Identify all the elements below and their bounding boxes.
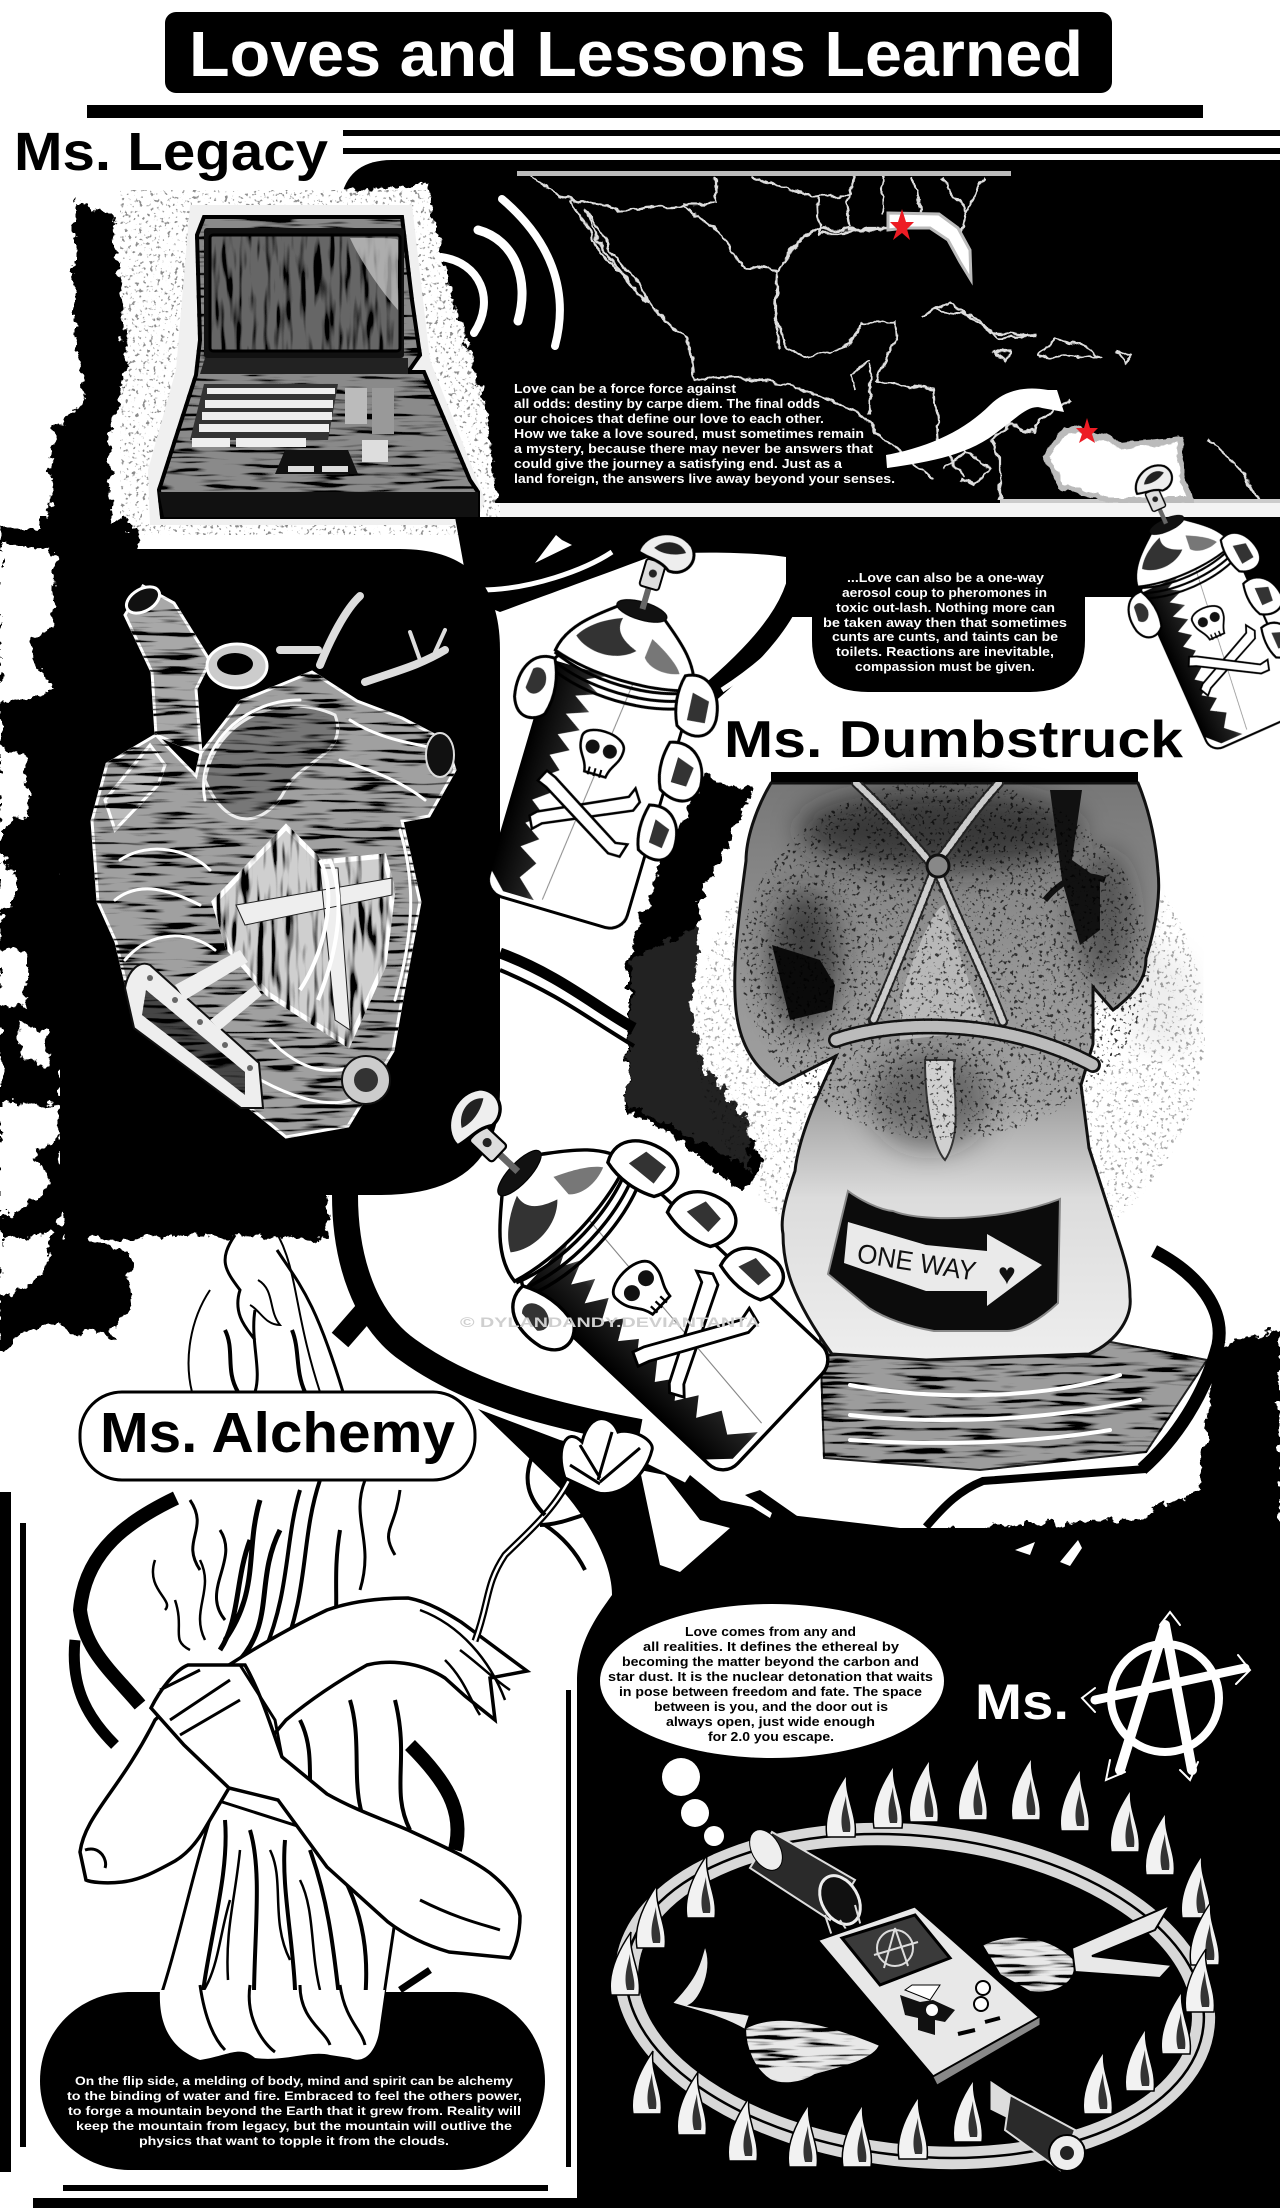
illustration: bear trap — [597, 1757, 1233, 2199]
text block: Ms. Dumbstruck: toxic out-lash. Nothing more can — [836, 600, 1055, 615]
map bottom border — [1000, 499, 1280, 503]
side bars: Ms. Alchemy frame — [0, 1492, 577, 2208]
heading pill: Ms. Alchemy — [80, 1392, 475, 1480]
illustration: bound torso — [695, 780, 1207, 1470]
torso body — [735, 783, 1159, 1360]
heading pill: Ms. Alchemy: Ms. Alchemy — [100, 1401, 455, 1465]
highlight strokes — [115, 700, 445, 1103]
black brush stripes — [680, 1475, 810, 1528]
text block: Ms. Dumbstruck: toilets. Reactions are inevitable, — [836, 644, 1054, 659]
tattoo: one way sign — [828, 1191, 1060, 1331]
text block: Ms. Alchemy: to forge a mountain beyond the Earth that it grew from. Reality will — [68, 2106, 521, 2118]
text block: Ms. Anarchy: always open, just wide enough — [666, 1715, 875, 1729]
text block: Ms. Anarchy: star dust. It is the nuclear detonation that waits — [608, 1670, 933, 1684]
gear — [342, 1056, 390, 1104]
spring cylinder: bottom — [990, 2080, 1085, 2171]
panel: Ms. Legacy — [48, 160, 1280, 535]
specks over torso — [740, 780, 1150, 1140]
panel: heart backdrop — [60, 549, 500, 1240]
red star: south — [1076, 418, 1098, 443]
flames above heading — [189, 1215, 343, 1392]
fabric folds — [850, 1375, 1140, 1443]
heading: Ms. Legacy: Ms. Legacy — [14, 122, 328, 182]
text block: Ms. Dumbstruck: compassion must be given. — [855, 659, 1035, 674]
icon: laptop — [159, 217, 478, 517]
hair strands over pill — [200, 1985, 365, 2052]
text block: Ms. Dumbstruck: be taken away then that sometimes — [823, 615, 1067, 630]
laptop white splash — [118, 186, 500, 530]
text block: Ms. Anarchy: for 2.0 you escape. — [708, 1730, 834, 1744]
arm: hand left to elbow right — [151, 1665, 520, 1958]
text block: Ms. Legacy: our choices that define our love to each other. — [514, 411, 824, 426]
text block: Ms. Dumbstruck: ...Love can also be a one-way — [847, 570, 1045, 585]
arm: elbow left to hand right — [80, 1598, 527, 1883]
shield — [214, 827, 393, 1045]
panel: Ms. Anarchy black ground — [478, 1330, 1280, 2208]
text block: Ms. Anarchy — [608, 1625, 933, 1744]
text block: Ms. Legacy: Love can be a force force against — [514, 381, 737, 396]
ropes — [836, 783, 1093, 1065]
text block: Ms. Legacy — [514, 381, 895, 486]
text block: Ms. Anarchy: Love comes from any and — [685, 1625, 856, 1639]
inner pale halo — [148, 205, 485, 525]
trap levers — [645, 1905, 1172, 2083]
outer spray specks — [695, 780, 1205, 1280]
arrow to Venezuela — [886, 389, 1064, 468]
pale spray halo — [1124, 947, 1196, 1052]
spray can: far right — [1077, 440, 1280, 761]
Venezuela highlighted — [1046, 428, 1190, 500]
illustration: Ms. Alchemy figure — [74, 1215, 652, 2056]
illustration: armoured heart — [92, 581, 455, 1137]
icon: anarchy symbol — [1082, 1612, 1250, 1780]
tattoo: one way sign: ONE WAY — [855, 1238, 978, 1287]
text block: Ms. Anarchy: between is you, and the door out is — [654, 1700, 888, 1714]
swoosh — [695, 560, 800, 705]
sweeping curves below heart — [340, 1195, 640, 1432]
text block: Ms. Legacy: land foreign, the answers live away beyond your senses. — [514, 471, 895, 486]
map — [530, 176, 1260, 500]
text block: Ms. Alchemy: On the flip side, a melding of body, mind and spirit can be alchemy — [75, 2076, 514, 2088]
spray can: bottom centre — [373, 1021, 863, 1501]
panel: Ms. Alchemy text pill — [40, 1985, 545, 2170]
white wedge — [535, 535, 572, 563]
heading: Ms. Anarchy: Ms. — [975, 1674, 1069, 1730]
white brush streaks — [640, 1470, 1082, 1572]
central ink blob with watermark tone — [500, 775, 765, 1192]
signal arcs — [441, 199, 560, 346]
text block: Ms. Alchemy: keep the mountain from legacy, but the mountain will outlive the — [76, 2121, 512, 2133]
fabric below waist — [820, 1331, 1207, 1470]
spring cylinder: top — [743, 1824, 869, 1945]
text block: Ms. Anarchy: all realities. It defines the ethereal by — [643, 1640, 899, 1654]
trap ring — [597, 1793, 1233, 2199]
text block: Ms. Alchemy — [67, 2076, 522, 2148]
title banner: Loves and Lessons Learned — [189, 18, 1083, 90]
Florida highlighted — [888, 213, 971, 280]
dark shading — [770, 790, 1135, 1150]
text block: Ms. Anarchy: becoming the matter beyond the carbon and — [622, 1655, 919, 1669]
left ink margin — [0, 523, 140, 1350]
upper hair behind arms — [300, 1700, 410, 1840]
black map panel — [340, 160, 1280, 503]
lower hair — [155, 1800, 404, 2056]
tattoo: one way sign: ♥ — [998, 1258, 1016, 1291]
heading: Ms. Dumbstruck: Ms. Dumbstruck — [724, 711, 1183, 769]
handheld game device — [817, 1906, 1040, 2085]
spray can: upper left — [458, 504, 767, 942]
text block: Ms. Dumbstruck: aerosol coup to pheromones in — [842, 585, 1047, 600]
text block: Ms. Legacy: How we take a love soured, must sometimes remain — [514, 426, 864, 441]
red star: north — [890, 209, 914, 240]
thought bubble: Ms. Anarchy — [600, 1604, 944, 1846]
text block: Ms. Dumbstruck: cunts are cunts, and taints can be — [832, 629, 1058, 644]
map top border — [517, 171, 1011, 176]
panel: upper-centre ink band — [455, 503, 1280, 705]
ink edges around torso — [926, 1251, 1219, 1527]
text block: Ms. Alchemy: to the binding of water and fire. Embraced to feel the others power, — [67, 2091, 522, 2103]
flower — [475, 1419, 652, 1641]
left ink splatter — [48, 200, 125, 530]
text block: Ms. Legacy: a mystery, because there may never be answers that — [514, 441, 874, 456]
watermark: © DYLANDANDY.DEVIANTANTA — [460, 1314, 760, 1330]
splash speckle — [120, 190, 500, 535]
upper hair — [153, 1480, 400, 1660]
text block: Ms. Legacy: all odds: destiny by carpe diem. The final odds — [514, 396, 820, 411]
text block: Ms. Anarchy: in pose between freedom and fate. The space — [619, 1685, 922, 1699]
trap teeth — [610, 1757, 1219, 2167]
black ring strokes — [74, 1498, 458, 1990]
hair ends over pill — [160, 1990, 385, 2060]
white blotches — [0, 545, 62, 1295]
text block: Ms. Dumbstruck — [823, 570, 1067, 674]
armour band — [125, 950, 263, 1108]
text block: Ms. Alchemy: physics that want to topple it from the clouds. — [139, 2136, 449, 2148]
text block: Ms. Legacy: could give the journey a satisfying end. Just as a — [514, 456, 843, 471]
speech bubble: Ms. Dumbstruck — [786, 517, 1085, 692]
